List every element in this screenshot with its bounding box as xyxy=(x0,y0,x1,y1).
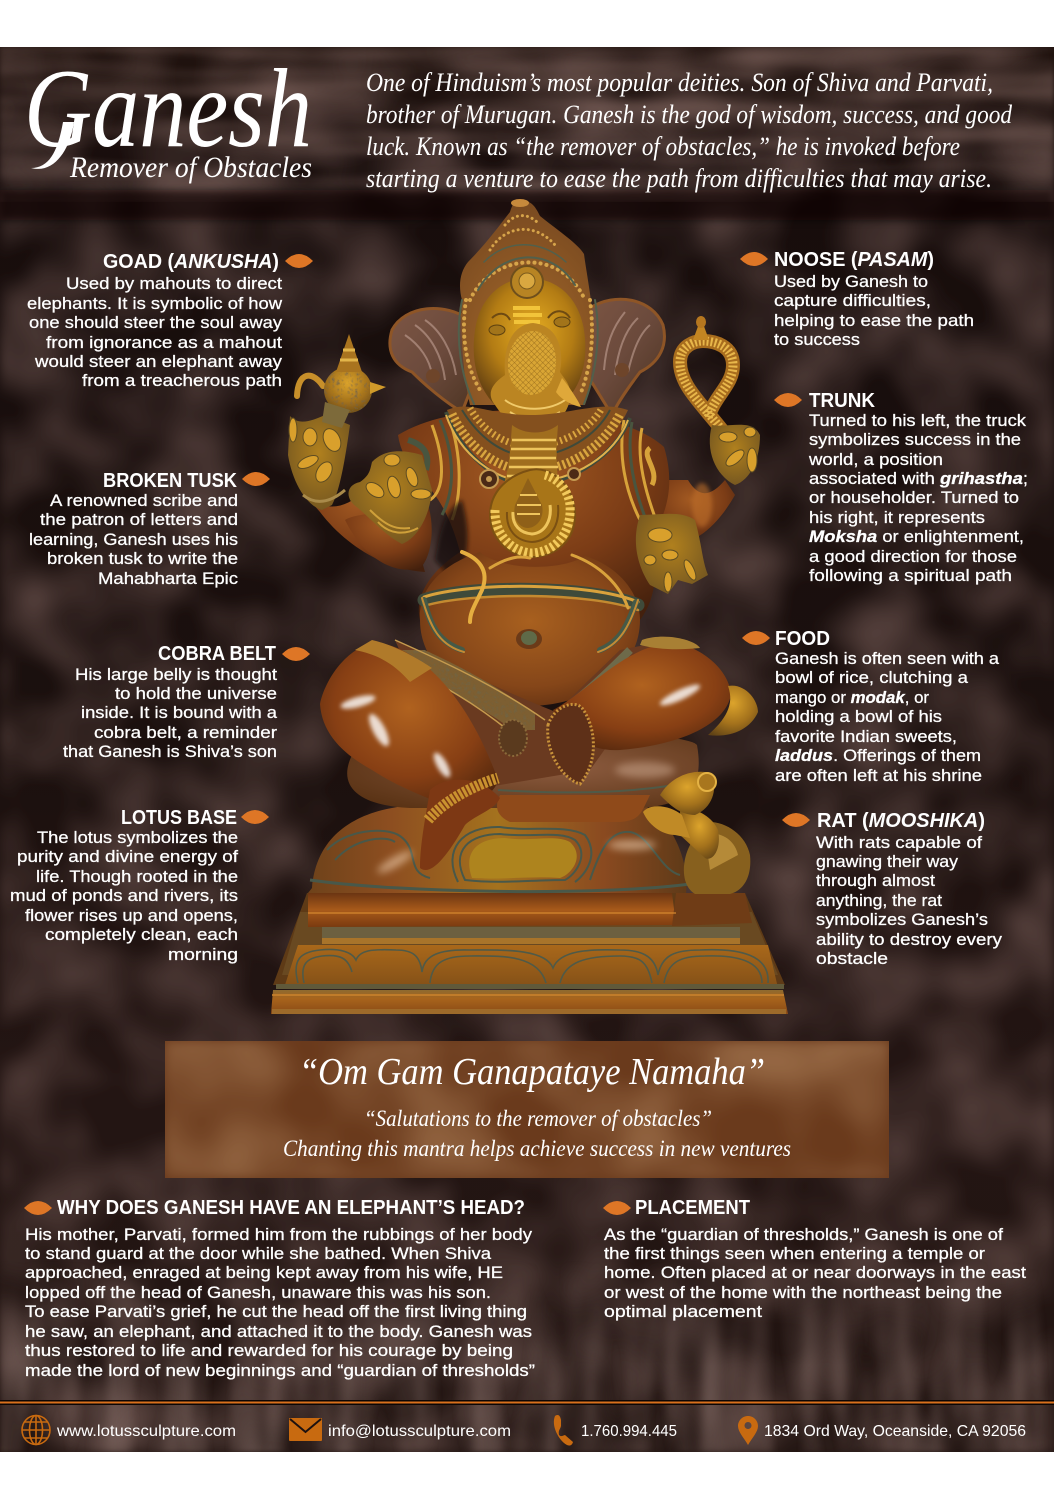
leaf icon: rat xyxy=(782,813,810,827)
body: rat: anything, the rat xyxy=(816,891,942,910)
body: goad: Used by mahouts to direct xyxy=(66,274,282,293)
panel: cobra belt xyxy=(63,643,310,761)
snake belt xyxy=(422,552,638,652)
chest ornaments xyxy=(480,468,580,488)
body: why: thus restored to life and rewarded for his courage by being xyxy=(25,1341,513,1360)
footer rule xyxy=(0,1400,1054,1405)
goad conch xyxy=(297,334,386,428)
body: rat xyxy=(816,833,1003,968)
statue of Ganesh xyxy=(271,199,788,1014)
right front hand xyxy=(636,514,708,594)
crown xyxy=(460,200,594,405)
G swash xyxy=(31,122,74,169)
mantra note: Chanting this mantra helps achieve success in new ventures xyxy=(283,1136,791,1161)
right hand with noose loop xyxy=(680,316,760,485)
leaf icon: food xyxy=(742,631,770,645)
body: noose: Used by Ganesh to xyxy=(774,272,928,291)
left front forearm xyxy=(345,505,432,570)
footer contact bar xyxy=(0,1400,1054,1446)
body: why: made the lord of new beginnings and “guardian of thresholds” xyxy=(25,1361,535,1380)
left thigh and shin xyxy=(320,643,498,806)
left ear xyxy=(390,309,482,412)
second foot xyxy=(548,704,593,784)
panel: rat xyxy=(782,810,1003,968)
dhoti sash xyxy=(395,640,670,790)
body: broken tusk: the patron of letters and xyxy=(40,510,238,529)
body: trunk: world, a position xyxy=(808,450,943,469)
body: food: mango or modak, or xyxy=(775,688,929,707)
body: why: lopped off the head of Ganesh, unaware this was his son. xyxy=(25,1283,491,1302)
tusk xyxy=(556,378,581,407)
specular highlights xyxy=(339,681,702,780)
phone number: 1.760.994.445 xyxy=(581,1423,677,1440)
intro text: One of Hinduism’s most popular deities. Son of Shiva and Parvati, xyxy=(366,68,993,97)
body: goad: elephants. It is symbolic of how xyxy=(27,294,283,313)
body: goad: one should steer the soul away xyxy=(29,313,283,332)
body: rat: ability to destroy every xyxy=(816,930,1003,949)
body: lotus base: completely clean, each xyxy=(45,925,238,944)
heading: trunk: TRUNK xyxy=(809,390,876,412)
forehead disc and marks xyxy=(489,266,570,335)
body: food: bowl of rice, clutching a xyxy=(775,668,969,687)
torso xyxy=(398,410,669,620)
left front hand xyxy=(348,451,432,544)
leaf icon: broken tusk xyxy=(242,472,270,486)
body: food: favorite Indian sweets, xyxy=(775,727,957,746)
trunk spiral xyxy=(490,469,575,557)
plinth xyxy=(308,893,676,927)
body: cobra belt xyxy=(63,665,278,761)
body: lotus base: mud of ponds and rivers, its xyxy=(10,886,238,905)
lotus cushion xyxy=(308,804,687,893)
body: goad: from a treacherous path xyxy=(82,371,282,390)
heading: why: WHY DOES GANESH HAVE AN ELEPHANT’S HEAD? xyxy=(57,1197,525,1219)
body: rat: obstacle xyxy=(816,949,888,968)
body: goad xyxy=(27,274,283,390)
heading: cobra belt: COBRA BELT xyxy=(158,643,276,665)
panel: goad xyxy=(27,251,313,390)
panel: trunk xyxy=(774,390,1028,585)
leaf icon: placement xyxy=(603,1201,631,1215)
heading: placement: PLACEMENT xyxy=(635,1197,750,1219)
body: cobra belt: to hold the universe xyxy=(115,684,277,703)
gold lobe panel xyxy=(469,838,577,879)
body: lotus base: purity and divine energy of xyxy=(17,847,238,866)
body: placement: As the “guardian of thresholds,” Ganesh is one of xyxy=(604,1225,1003,1244)
base tiers xyxy=(271,893,788,1014)
body: food: are often left at his shrine xyxy=(775,766,982,785)
intro text xyxy=(366,68,1013,193)
mantra title: “Om Gam Ganapataye Namaha” xyxy=(299,1051,765,1093)
right thigh xyxy=(553,642,731,750)
body: goad: would steer an elephant away xyxy=(34,352,283,371)
panel: why elephant head xyxy=(24,1197,535,1380)
body: goad: from ignorance as a mahout xyxy=(46,333,282,352)
body: rat: gnawing their way xyxy=(816,852,959,871)
body: why xyxy=(25,1225,535,1380)
leaf icon: trunk xyxy=(774,393,802,407)
body: lotus base: The lotus symbolizes the xyxy=(37,828,238,847)
chest shadow xyxy=(435,500,468,585)
heading: broken tusk: BROKEN TUSK xyxy=(103,470,238,492)
body: rat: With rats capable of xyxy=(816,833,982,852)
upper trunk xyxy=(491,323,570,432)
leaf icon: lotus base xyxy=(241,810,269,824)
body: broken tusk: broken tusk to write the xyxy=(47,549,238,568)
body: cobra belt: His large belly is thought xyxy=(75,665,277,684)
body: rat: symbolizes Ganesh’s xyxy=(816,910,988,929)
body: broken tusk: A renowned scribe and xyxy=(50,491,238,510)
heading: rat: RAT (MOOSHIKA) xyxy=(817,810,985,832)
body: placement xyxy=(604,1225,1026,1321)
heading: goad: GOAD (ANKUSHA) xyxy=(103,251,279,273)
icon: map pin xyxy=(738,1416,758,1445)
body: lotus base: morning xyxy=(168,945,238,964)
leaf icon: goad xyxy=(285,254,313,268)
body: noose: capture difficulties, xyxy=(774,291,931,310)
body: cobra belt: cobra belt, a reminder xyxy=(94,723,277,742)
back arm right xyxy=(655,480,735,546)
panel: lotus base xyxy=(10,807,269,964)
body: trunk: associated with grihastha ; xyxy=(809,469,1028,488)
body: trunk: symbolizes success in the xyxy=(809,430,1021,449)
leaf icon: why xyxy=(24,1201,52,1215)
right ear xyxy=(578,299,664,415)
icon: globe xyxy=(22,1416,50,1444)
body: trunk xyxy=(808,411,1028,585)
body: placement: optimal placement xyxy=(604,1302,762,1321)
knee ornament band xyxy=(355,640,432,682)
mantra panel xyxy=(165,1041,889,1178)
dangling foot xyxy=(420,780,500,870)
title block xyxy=(24,47,312,184)
lower trunk xyxy=(500,425,560,495)
necklace collar xyxy=(447,407,628,475)
body: placement: the first things seen when entering a temple or xyxy=(604,1244,985,1263)
mantra translation: “Salutations to the remover of obstacles” xyxy=(364,1106,712,1131)
leaf icon: cobra belt xyxy=(282,647,310,661)
face xyxy=(474,278,585,405)
heading: food: FOOD xyxy=(775,628,830,650)
body: food: Ganesh is often seen with a xyxy=(775,649,1000,668)
body: why: approached, enraged at being kept away from his wife, HE xyxy=(25,1263,503,1282)
panel: food xyxy=(742,628,1000,785)
panel: broken tusk xyxy=(29,470,270,588)
address: 1834 Ord Way, Oceanside, CA 92056 xyxy=(764,1423,1026,1440)
email: info@lotussculpture.com xyxy=(328,1423,511,1440)
body: lotus base: flower rises up and opens, xyxy=(25,906,238,925)
body: rat: through almost xyxy=(816,871,935,890)
panel: noose xyxy=(740,249,974,349)
leaf icon: noose xyxy=(740,252,768,266)
body: lotus base: life. Though rooted in the xyxy=(36,867,238,886)
body: why: His mother, Parvati, formed him from the rubbings of her body xyxy=(25,1225,533,1244)
rat xyxy=(643,772,750,894)
body: noose xyxy=(774,272,974,349)
body: noose: to success xyxy=(774,330,860,349)
body: noose: helping to ease the path xyxy=(774,311,974,330)
icon: phone xyxy=(554,1415,573,1446)
body: trunk: a good direction for those xyxy=(809,547,1017,566)
body: broken tusk: learning, Ganesh uses his xyxy=(29,530,238,549)
body: trunk: Moksha or enlightenment, xyxy=(809,527,1024,546)
left back hand xyxy=(288,415,350,510)
body: placement: or west of the home with the northeast being the xyxy=(604,1283,1002,1302)
panel: placement xyxy=(603,1197,1026,1321)
subtitle: Remover of Obstacles xyxy=(69,151,312,184)
navel xyxy=(516,629,542,649)
mantra background xyxy=(165,1041,889,1178)
body: trunk: his right, it represents xyxy=(809,508,985,527)
intro text: luck. Known as “the remover of obstacles,” he is invoked before xyxy=(366,132,960,161)
belly xyxy=(420,552,640,706)
website: www.lotussculpture.com xyxy=(56,1423,236,1440)
icon: envelope xyxy=(289,1418,322,1441)
body: food xyxy=(775,649,1000,785)
body: trunk: Turned to his left, the truck xyxy=(809,411,1027,430)
lotus highlights xyxy=(375,840,656,876)
body: trunk: following a spiritual path xyxy=(809,566,1012,585)
body: lotus base xyxy=(10,828,238,964)
right foot xyxy=(708,686,758,736)
body: why: he saw, an elephant, and attached it to the body. Ganesh was xyxy=(25,1322,532,1341)
body: food: laddus. Offerings of them xyxy=(775,746,981,765)
body: why: to stand guard at the door while she bathed. When Shiva xyxy=(25,1244,492,1263)
central ornament xyxy=(499,720,527,756)
body: placement: home. Often placed at or near doorways in the east xyxy=(604,1263,1026,1282)
seat cushion xyxy=(347,734,699,808)
body: food: holding a bowl of his xyxy=(775,707,942,726)
body: trunk: or householder. Turned to xyxy=(809,488,1019,507)
body: why: To ease Parvati’s grief, he cut the head off the first living thing xyxy=(25,1302,527,1321)
rat base xyxy=(672,893,752,926)
heading: lotus base: LOTUS BASE xyxy=(121,807,237,829)
heading: noose: NOOSE (PASAM) xyxy=(774,249,934,271)
body: broken tusk: Mahabharta Epic xyxy=(98,569,239,588)
intro text: starting a venture to ease the path from difficulties that may arise. xyxy=(366,164,992,193)
body: cobra belt: that Ganesh is Shiva’s son xyxy=(63,742,277,761)
body: cobra belt: inside. It is bound with a xyxy=(81,703,278,722)
shoulder ornaments xyxy=(408,418,656,525)
anklet xyxy=(428,778,498,820)
body: broken tusk xyxy=(29,491,239,588)
title: Ganesh: Ganesh xyxy=(24,47,312,171)
back arm left xyxy=(305,470,425,572)
